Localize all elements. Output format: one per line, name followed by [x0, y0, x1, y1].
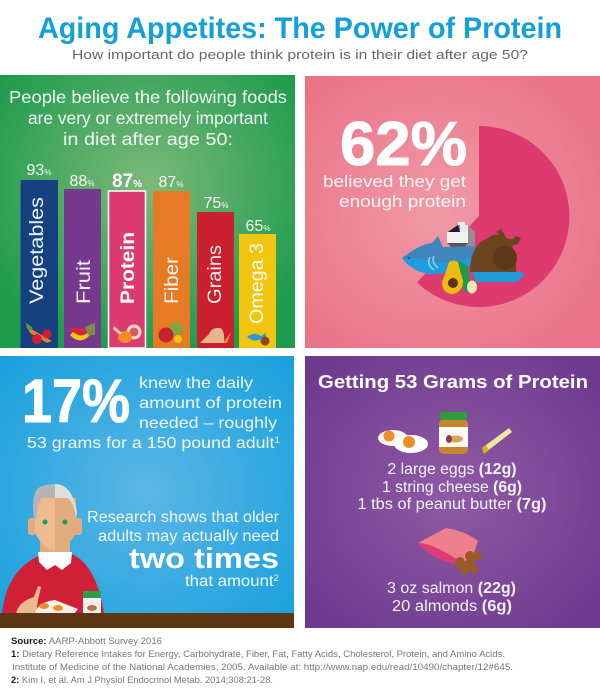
panel: 62 percent	[305, 76, 600, 348]
food list 2: 20 almonds (6g)	[392, 598, 512, 615]
panel heading: in diet after age 50:	[63, 129, 233, 149]
food list 2	[387, 580, 516, 615]
bar: Omega 3: Omega 3	[247, 243, 268, 324]
bar: Fruit: 88%	[70, 173, 94, 190]
bar: Protein (highlighted)	[108, 171, 146, 348]
sources	[11, 636, 513, 686]
stat caption: needed – roughly	[139, 415, 277, 432]
research text: that amount	[185, 573, 267, 590]
stat caption: knew the daily	[139, 375, 253, 392]
food list 1: 1 tbs of peanut butter (7g)	[358, 496, 546, 513]
sources: Institute of Medicine of the National Academies, 2005. Available at: http://www.nap.edu/read/10490/chapter/12#645.	[12, 662, 513, 673]
bar: Fiber: Fiber	[162, 256, 183, 304]
sources: 2: Kim I, et al. Am J Physiol Endocrinol Metab. 2014;308:21-28.	[11, 675, 273, 686]
research text: 2	[274, 573, 279, 583]
stat caption: amount of protein	[139, 395, 282, 412]
bar: Fiber	[153, 174, 190, 348]
bar: Vegetables: 93%	[27, 162, 51, 179]
title: Aging Appetites: The Power of Protein	[38, 12, 562, 45]
illustration: older man with meal	[2, 484, 104, 614]
table	[0, 613, 294, 628]
bar: Omega 3	[239, 218, 276, 348]
icon: eggs	[378, 430, 428, 453]
food list 1	[358, 461, 546, 513]
bar: Fruit	[64, 173, 101, 348]
stat: 17%: 17%	[22, 367, 130, 435]
icon: string cheese	[482, 428, 512, 454]
food list 1: 2 large eggs (12g)	[388, 461, 516, 478]
panel heading: Getting 53 Grams of Protein	[318, 372, 588, 392]
panel heading: People believe the following foods	[9, 87, 287, 107]
bar: Fiber: 87%	[159, 174, 183, 191]
food list 1: 1 string cheese (6g)	[382, 479, 522, 496]
bar: Fruit: Fruit	[74, 259, 95, 304]
sources: 1: Dietary Reference Intakes for Energy, Carbohydrate, Fiber, Fat, Fatty Acids, Cholesterol, Protein, and Amino Acids.	[11, 649, 505, 660]
stat caption: 53 grams for a 150 pound adult	[27, 435, 249, 452]
research text	[87, 509, 279, 590]
panel heading: are very or extremely important	[28, 108, 268, 128]
icon: salmon and almonds	[418, 528, 482, 575]
subtitle: How important do people think protein is in their diet after age 50?	[72, 47, 528, 62]
stat: 62%: 62%	[340, 110, 467, 179]
research text: two times	[129, 543, 279, 575]
stat caption: enough protein	[339, 193, 466, 211]
bar: Vegetables	[20, 162, 58, 348]
panel: getting 53 grams	[305, 356, 600, 628]
research text: Research shows that older	[87, 509, 279, 526]
icon: protein foods	[402, 222, 523, 294]
pie chart	[417, 126, 569, 307]
bar: Protein (highlighted): 87%	[112, 171, 142, 192]
food list 2: 3 oz salmon (22g)	[387, 580, 516, 597]
bar: Grains: 75%	[204, 195, 228, 212]
stat caption	[27, 375, 282, 452]
stat caption: believed they get	[323, 173, 466, 191]
bar: Grains: Grains	[205, 245, 226, 304]
research text: adults may actually need	[98, 528, 279, 545]
sources: Source: AARP-Abbott Survey 2016	[11, 636, 162, 647]
panel: food importance bar chart	[0, 75, 295, 348]
panel: 17 percent	[0, 356, 294, 628]
bar: Omega 3: 65%	[246, 218, 270, 235]
stat caption	[323, 173, 466, 211]
bar: Protein (highlighted): Protein	[118, 232, 139, 304]
icon: peanut butter jar	[439, 412, 468, 454]
panel heading	[9, 87, 287, 149]
bar: Grains	[197, 195, 234, 348]
bar: Vegetables: Vegetables	[27, 197, 48, 304]
stat caption: 1	[274, 435, 280, 445]
